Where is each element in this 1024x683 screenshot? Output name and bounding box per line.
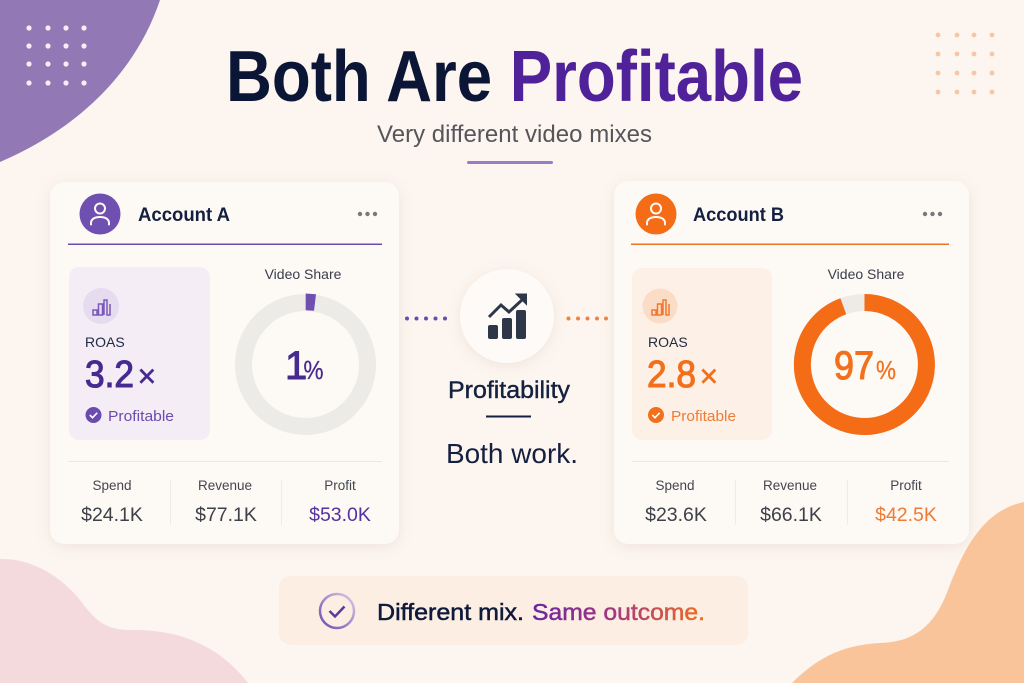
stat: Revenue: Revenue [198, 478, 252, 493]
value: 3.2x: 3.2 [85, 354, 134, 396]
decorative dots: top left [26, 25, 87, 86]
panel: Account A [50, 182, 399, 544]
value: 2.8x: 2.8 [647, 354, 696, 396]
icon: profitability chart [460, 269, 554, 363]
icon: check circle [320, 594, 354, 628]
label: Profitability: Profitability [448, 377, 570, 404]
stat: Profit [875, 478, 937, 526]
chart: donut 1%: 1 [285, 344, 307, 388]
stat: Spend: $23.6K [645, 504, 707, 526]
stat: Revenue: Revenue [763, 478, 817, 493]
stat: Revenue [195, 478, 257, 526]
icon: more menu [358, 212, 377, 216]
stat: Spend: Spend [655, 478, 695, 493]
text: Different mix. Same outcome.: Same outcome. [532, 599, 705, 625]
decorative blob: bottom left [0, 559, 248, 683]
stat: Revenue: $66.1K [760, 504, 822, 526]
icon: Account B avatar [636, 194, 676, 234]
label: ROAS: ROAS [85, 334, 125, 350]
stat: Profit: $42.5K [875, 504, 937, 526]
title underline [467, 161, 553, 164]
value: 3.2x: × [138, 358, 156, 394]
subtitle: Very different video mixes [377, 121, 652, 148]
divider [68, 461, 382, 462]
panel: Account B [614, 181, 969, 544]
label: Video Share A: Video Share [265, 266, 342, 282]
panel: ROAS B [632, 268, 772, 440]
decorative blob: bottom right [792, 502, 1024, 683]
chart: donut 97%: % [876, 355, 896, 385]
badge: Profitable [648, 407, 736, 425]
connector: purple dots [405, 316, 447, 320]
value: 2.8x: × [700, 358, 718, 394]
heading: Account B: Account B [693, 205, 784, 226]
heading: Account A: Account A [138, 205, 230, 226]
label: Both work.: Both work. [446, 438, 578, 469]
decorative blob: top left [0, 0, 160, 162]
chart: donut 97%: 97 [834, 344, 874, 388]
stat: Revenue: $77.1K [195, 504, 257, 526]
stat: Profit [309, 478, 371, 526]
connector: orange dots [566, 316, 608, 320]
stat: Spend [81, 478, 143, 526]
stat: Spend [645, 478, 707, 526]
callout: bottom banner [279, 576, 748, 645]
badge: Profitable: Profitable [108, 408, 174, 425]
stat: Spend: Spend [92, 478, 132, 493]
chart: donut 97% [802, 302, 926, 426]
panel: ROAS A [69, 267, 210, 440]
header rule [631, 244, 949, 245]
stat: Profit: Profit [324, 478, 356, 493]
title: Both Are Profitable [226, 37, 803, 117]
text: Different mix. Same outcome.: Different mix. [377, 599, 524, 625]
icon: ROAS bars [642, 288, 678, 324]
stat: Revenue [760, 478, 822, 526]
header rule [68, 244, 382, 245]
chart: donut 1%: % [304, 355, 324, 385]
label: Video Share B: Video Share [828, 266, 905, 282]
stat: Profit: Profit [890, 478, 922, 493]
decorative dots: top right [936, 33, 994, 94]
rule [486, 416, 531, 418]
divider [632, 461, 949, 462]
chart: donut 1% [244, 294, 368, 426]
badge: Profitable: Profitable [671, 408, 736, 425]
badge: Profitable [86, 407, 174, 425]
icon: more menu [923, 212, 942, 216]
icon: ROAS bars [83, 288, 119, 324]
stat: Profit: $53.0K [309, 504, 371, 526]
stat: Spend: $24.1K [81, 504, 143, 526]
icon: Account A avatar [80, 194, 120, 234]
text: Different mix. Same outcome. [377, 599, 705, 625]
label: ROAS: ROAS [648, 334, 688, 350]
